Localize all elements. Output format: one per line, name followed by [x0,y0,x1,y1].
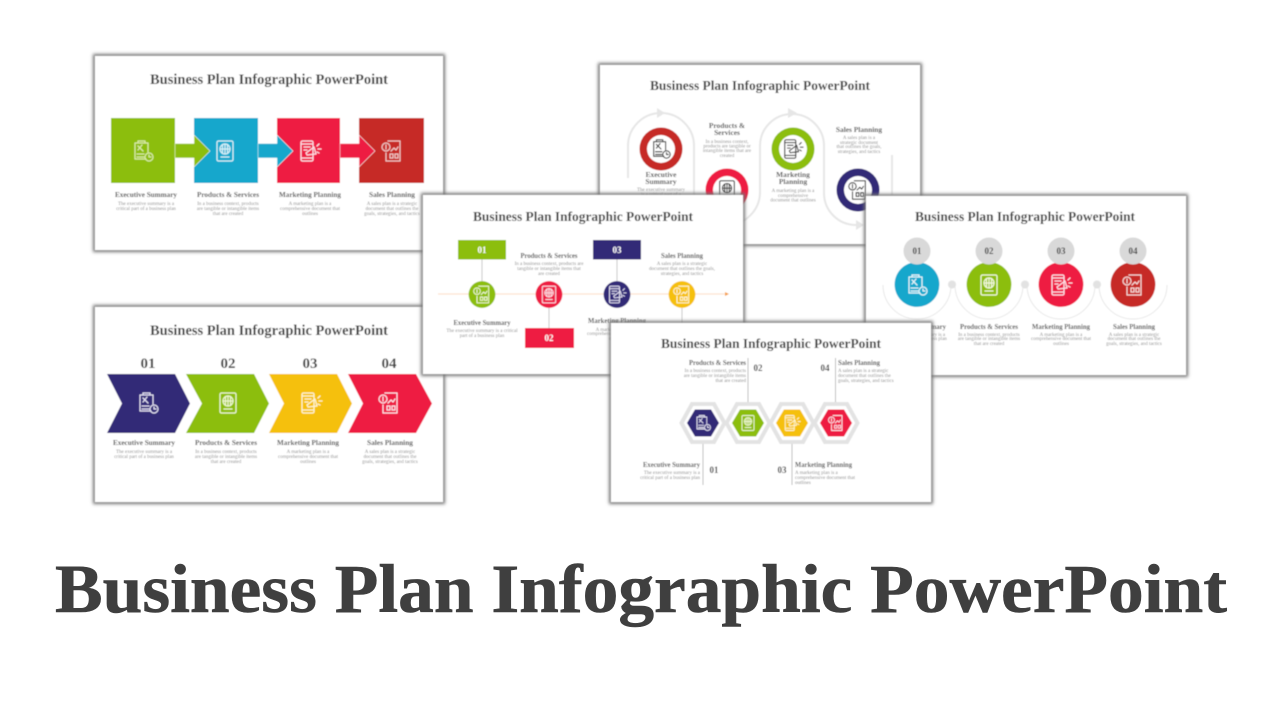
frame [609,321,933,504]
step: executive summary [115,190,177,212]
step: sales planning: A sales plan is a strategic [657,262,708,267]
step: sales planning [649,251,715,277]
heading: Business Plan Infographic PowerPoint [473,210,693,225]
step: marketing planning: Marketing Planning [795,460,852,469]
timeline circles [469,281,695,308]
step: executive summary: critical part of a business plan [640,476,700,481]
step: products and services: products are tangible or [703,144,751,150]
step: marketing planning: outlines [609,337,625,342]
step: executive summary: Executive Summary [454,318,511,327]
number 02: 02 [754,363,763,373]
step: executive summary: Executive [646,170,677,179]
icons [474,286,689,303]
step: sales planning [836,125,882,155]
step: products and services: that are created [213,212,244,217]
number 01: 01 [710,465,719,475]
connectors and number boxes: 01 [478,245,487,255]
slide: square arrows [93,54,445,252]
step: executive summary [446,318,518,339]
step: products and services [958,322,1020,347]
step: sales planning: Sales Planning [661,251,703,260]
step: executive summary: critical part of a business plan [887,337,947,342]
step: products and services: created [720,154,735,159]
step: sales planning [362,438,418,465]
step: executive summary: The executive summary is a [889,333,946,338]
step: sales planning: Sales Planning [369,190,415,199]
arcs and dots [883,280,1167,319]
connector lines [703,358,836,485]
rings [640,128,880,212]
step: marketing planning: A marketing plan is a [287,450,330,455]
step: executive summary [637,170,686,198]
step: marketing planning: outlines [1053,342,1069,347]
step: marketing planning: comprehensive document that [587,332,648,337]
step: sales planning: document that outlines the [366,207,419,212]
frame [864,194,1188,377]
step: products and services [703,121,752,159]
step: sales planning: goals, strategies, and tactics [362,460,418,465]
step: sales planning: strategies, and tactics [838,150,880,155]
step: marketing planning: A marketing plan is a [596,328,639,333]
step: products and services: In a business context, products [197,202,259,207]
step: marketing planning [277,438,339,465]
numbers: 02 [220,356,236,372]
step: marketing planning: comprehensive document that [795,476,856,481]
icons [697,416,842,430]
step: sales planning: that outlines the goals, [836,145,882,150]
step: products and services: Products & Services [960,322,1018,331]
step: sales planning: Sales Planning [836,125,882,134]
step: sales planning: A sales plan is a strategic [838,369,889,374]
step: marketing planning: A marketing plan is a [795,471,839,476]
step: marketing planning: outlines [302,212,318,217]
step: products and services: Products & Services [520,251,578,260]
step: executive summary: part of a business plan [460,334,505,339]
step: marketing planning: outlines [795,481,811,486]
step: marketing planning [770,170,816,204]
step: sales planning: A sales plan is a strategic [1109,333,1160,338]
step: sales planning: A sales plan is a strategic [365,450,416,455]
step: products and services [195,438,257,465]
step: products and services: In a business context, products [684,369,746,374]
winding path [628,108,892,230]
timeline arrow [438,292,729,296]
step: executive summary: is a critical part of a [641,193,682,198]
step: marketing planning: comprehensive document that [280,207,341,212]
step: products and services: intangible items that are [703,149,752,154]
step: executive summary: Executive Summary [643,460,700,469]
step: sales planning: document that outlines the [364,455,417,460]
connectors and number boxes [458,240,682,348]
step: sales planning: strategic document [840,141,879,146]
slide: chevrons [93,305,445,504]
icons [909,275,1141,295]
number badges: 03 [1056,246,1066,256]
step: executive summary [640,460,701,481]
step: marketing planning: Marketing Planning [1032,322,1090,331]
icons [654,140,865,199]
frame [421,193,745,376]
step: products and services: In a business context, products [958,333,1020,338]
step: executive summary: critical part of a business plan [116,207,176,212]
heading: Business Plan Infographic PowerPoint [150,72,388,88]
step: products and services [684,358,746,384]
step: executive summary [113,438,175,460]
connectors and number boxes: 03 [612,245,622,255]
step: marketing planning: Marketing Planning [279,190,341,199]
step: sales planning: goals, strategies, and tactics [838,379,894,384]
slide: hexagons [609,321,933,504]
step: executive summary: The executive summary [637,188,686,193]
step: sales planning: A sales plan is a strategic [367,202,418,207]
icon circles [895,262,1155,307]
frame [598,63,922,246]
arrow blocks [111,118,424,183]
step: sales planning [1106,322,1162,347]
step: products and services: are tangible or intangible items [197,207,259,212]
step: marketing planning [587,316,648,342]
step: sales planning: strategies, and tactics [661,272,703,277]
numbers: 01 [140,356,156,372]
step: marketing planning: comprehensive document that [278,455,339,460]
hexagons [682,404,858,442]
number badges [904,238,1146,264]
slide: winding path rings [598,63,922,246]
step: marketing planning: comprehensive document that [1031,337,1092,342]
chevrons [107,374,432,433]
step: executive summary: The executive summary is a critical [446,329,518,334]
step: marketing planning: A marketing plan is a [772,189,815,194]
step: sales planning: A sales plan is a [843,136,876,141]
heading: Business Plan Infographic PowerPoint [661,337,881,352]
number badges: 01 [912,246,922,256]
step: products and services: Products & Services [689,358,746,367]
step: executive summary: Executive Summary [888,322,946,331]
step: sales planning: Sales Planning [1113,322,1155,331]
step: products and services: are tangible or intangible items [684,374,746,379]
step: products and services: that are created [715,379,746,384]
step: sales planning: Sales Planning [367,438,413,447]
step: executive summary: The executive summary is a [118,202,175,207]
step: products and services: tangible or intangible items that [517,267,581,272]
step: products and services: that are created [974,342,1005,347]
step: products and services: are tangible or intangible items [958,337,1020,342]
step: products and services: are tangible or intangible items [195,455,257,460]
step: marketing planning: A marketing plan is a [1040,333,1083,338]
step: products and services [197,190,259,217]
step: products and services: In a business context, products [195,450,257,455]
step: sales planning [838,358,894,384]
numbers: 03 [302,356,318,372]
frame [93,305,445,504]
number badges: 02 [984,246,994,256]
step: executive summary: Summary [645,177,677,186]
step: executive summary [887,322,947,342]
connectors and number boxes: 02 [544,333,554,343]
step: executive summary: The executive summary is a [116,450,173,455]
step: executive summary: Executive Summary [113,438,175,447]
step: products and services [515,251,584,277]
step: marketing planning: Marketing Planning [277,438,339,447]
step: products and services: Products & Services [197,190,259,199]
number 03: 03 [778,465,787,475]
step: executive summary: critical part of a business plan [114,455,174,460]
step: sales planning [364,190,420,217]
step: marketing planning: Marketing Planning [588,316,646,325]
step: marketing planning: document that outlines [770,198,816,204]
step: products and services: In a business context, products are [515,262,584,267]
icons [135,141,400,161]
heading: Business Plan Infographic PowerPoint [915,210,1135,225]
step: sales planning: document that outlines the [838,374,892,379]
heading: Business Plan Infographic PowerPoint [150,323,388,339]
step: marketing planning: comprehensive [778,194,809,199]
step: executive summary: The executive summary is a [644,471,701,476]
step: marketing planning: outlines [300,460,316,465]
slide: numbered circles [864,194,1188,377]
step: sales planning: goals, strategies, and tactics [1106,342,1162,347]
step: marketing planning: A marketing plan is a [289,202,332,207]
step: products and services: In a business context, [705,140,749,145]
step: sales planning: Sales Planning [838,358,880,367]
step: sales planning: goals, strategies, and tactics [364,212,420,217]
step: executive summary: Executive Summary [115,190,177,199]
step: marketing planning: Planning [779,177,807,186]
step: marketing planning: Marketing [776,170,810,179]
step: marketing planning [279,190,341,217]
number 04: 04 [820,363,830,373]
icons [140,393,397,413]
main title: Business Plan Infographic PowerPoint [55,551,1227,627]
step: products and services: Products & [709,121,745,130]
step: marketing planning [1031,322,1092,347]
numbers [140,356,397,372]
number badges: 04 [1128,246,1138,256]
step: sales planning: document that outlines the goals, [649,267,715,272]
step: products and services: are created [538,272,560,277]
step: products and services: that are created [211,460,242,465]
step: products and services: Products & Services [195,438,257,447]
step: marketing planning [795,460,856,486]
heading: Business Plan Infographic PowerPoint [650,79,870,94]
slide: timeline [421,193,745,376]
step: sales planning: document that outlines the [1108,337,1161,342]
numbers: 04 [382,356,397,372]
step: products and services: Services [714,128,740,137]
frame [93,54,445,252]
